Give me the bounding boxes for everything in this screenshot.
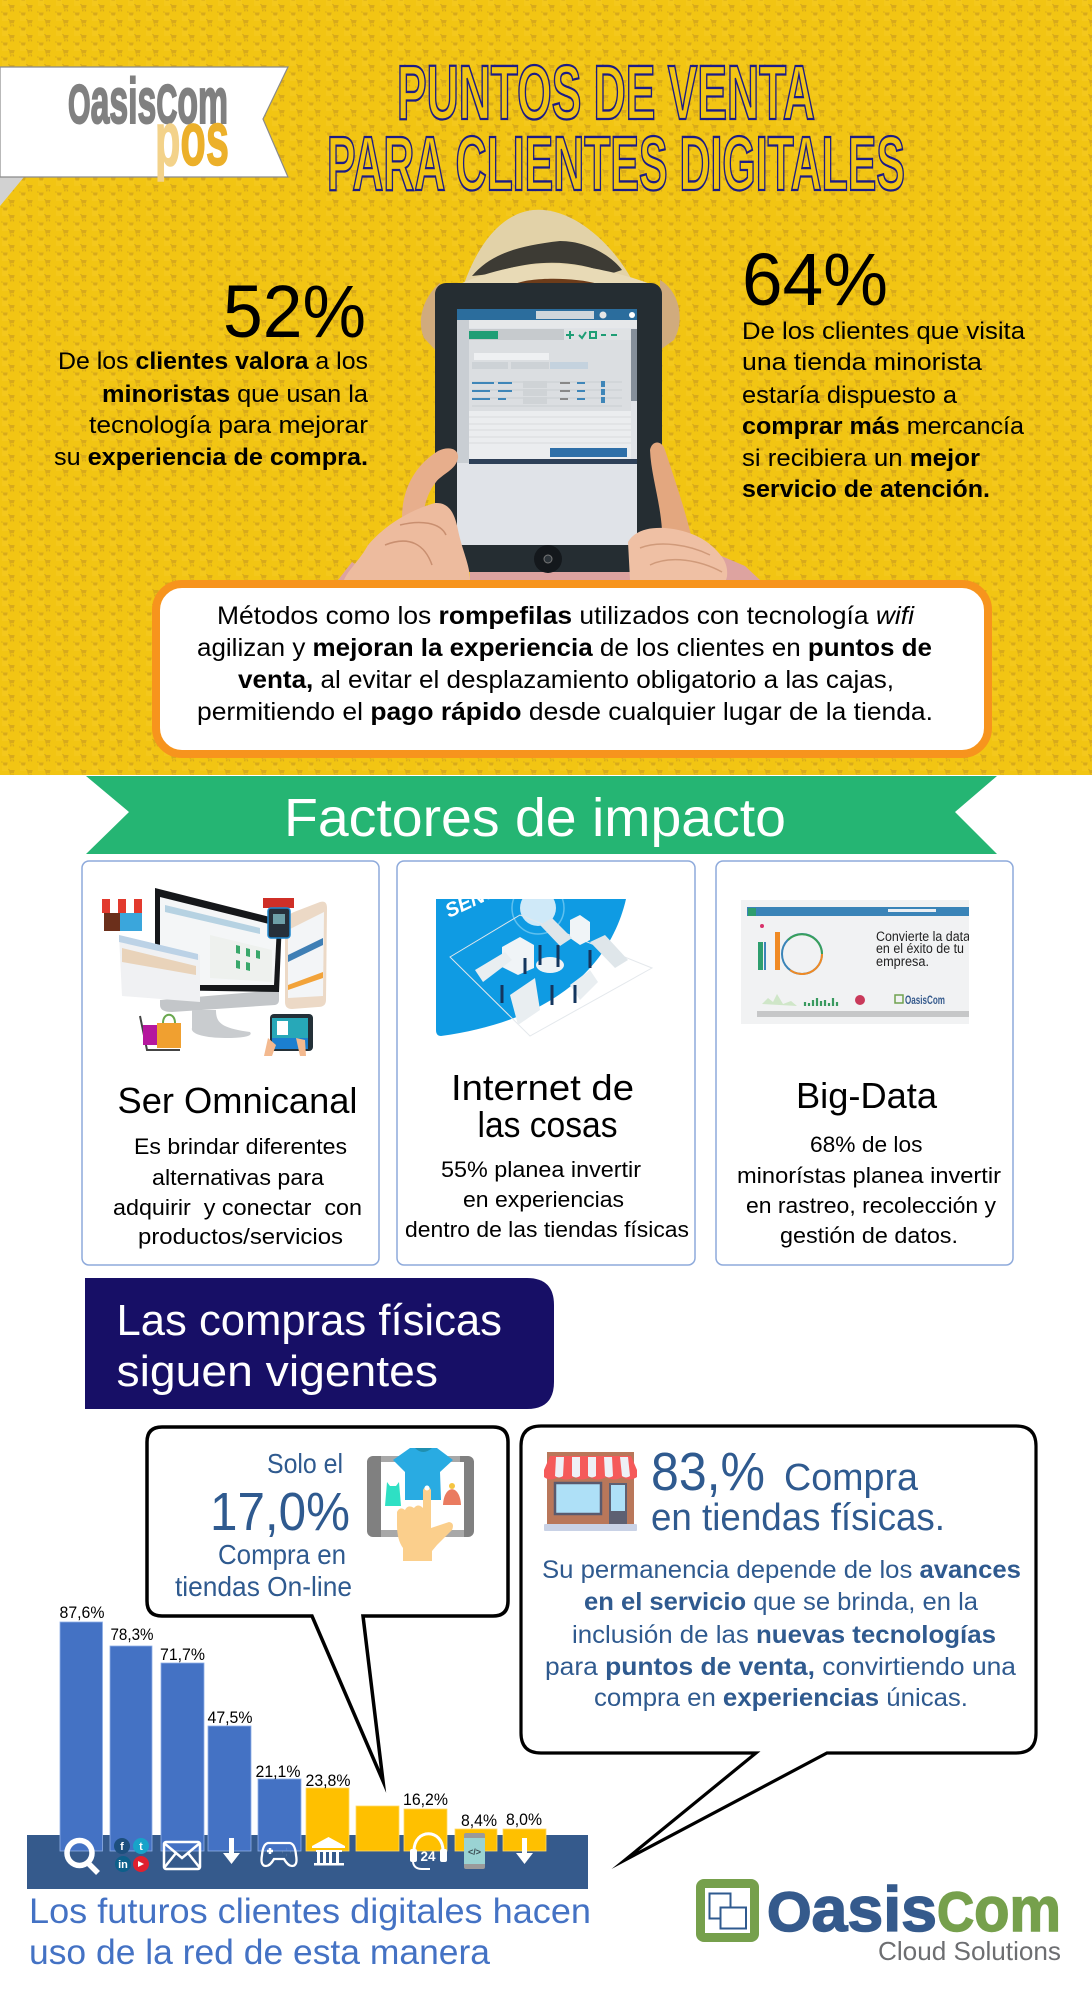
stat: 52% [54, 270, 368, 471]
icon: 24h headset: 24 [420, 1849, 436, 1864]
icon: search [67, 1840, 98, 1873]
bar value labels: 16,2% [403, 1790, 448, 1809]
stat: 64%: servicio de atención. [742, 476, 990, 503]
icon: game controller [262, 1843, 296, 1866]
heading: Las compras físicas siguen vigentes: Las compras físicas [116, 1296, 502, 1345]
bar value labels: 87,6% [60, 1603, 104, 1622]
illustration: isometric smart store: SENS [442, 879, 501, 923]
illustration: analytics screenshot: Convierte la data [876, 929, 970, 944]
stat: 64% [742, 238, 1025, 503]
stat: 64%: si recibiera un mejor [742, 445, 980, 472]
panel: Internet de las cosas [397, 861, 695, 1265]
hat crown [464, 210, 634, 284]
icon: mobile code: </> [468, 1847, 481, 1857]
stat: 52%: su experiencia de compra. [54, 444, 368, 471]
panel: Ser Omnicanal [82, 861, 379, 1265]
logo ribbon: OasisCom POS: OasisCom [68, 65, 228, 137]
heading ribbon: Factores de impacto: Factores de impacto [284, 788, 786, 848]
logo ribbon: OasisCom POS [0, 65, 288, 206]
panel: Ser Omnicanal: productos/servicios [138, 1224, 343, 1249]
stat: 64%: De los clientes que visita [742, 318, 1025, 345]
speech bubble: physical stores: compra en experiencias únicas. [594, 1684, 968, 1712]
illustration: analytics screenshot: OasisCom [905, 993, 945, 1007]
stat: 52%: minoristas que usan la [102, 381, 368, 408]
photo: person with hat holding tablet [338, 210, 760, 580]
panel: Internet de las cosas: dentro de las tiendas físicas [405, 1217, 689, 1242]
stat: 64%: estaría dispuesto a [742, 382, 957, 409]
bar chart: digital usage [27, 1603, 588, 1889]
bar value labels: 71,7% [160, 1645, 205, 1664]
icon: tablet shopping [367, 1448, 474, 1561]
speech bubble: online purchases: tiendas On-line [175, 1571, 352, 1602]
panel: Internet de las cosas: 55% planea invertir [441, 1157, 641, 1182]
speech bubble: online purchases: Compra en [218, 1539, 346, 1570]
panel: Ser Omnicanal: Es brindar diferentes [134, 1134, 347, 1159]
panel: Internet de las cosas: en experiencias [463, 1187, 624, 1212]
speech bubble: online purchases: 17,0% [210, 1482, 350, 1542]
illustration: analytics screenshot [741, 900, 970, 1024]
icon: download arrow [516, 1838, 533, 1864]
chart band [27, 1835, 588, 1889]
stat: 52%: tecnología para mejorar [89, 412, 368, 439]
illustration: analytics screenshot: empresa. [876, 954, 929, 969]
hat brim behind tablet [421, 280, 680, 355]
bar value labels: 78,3% [110, 1625, 154, 1644]
logo: OasisCom Cloud Solutions: Oasis [767, 1875, 937, 1945]
stat: 52%: 52% [223, 270, 366, 353]
title [327, 50, 905, 207]
yellow bars [306, 1788, 546, 1851]
logo: OasisCom Cloud Solutions [696, 1875, 1061, 1966]
heading: Las compras físicas siguen vigentes: siguen vigentes [116, 1347, 438, 1396]
illustration: analytics screenshot: en el éxito de tu [876, 941, 964, 956]
icon: mail [164, 1842, 200, 1869]
yellow patterned background [0, 0, 1092, 775]
speech bubble: physical stores: Compra [784, 1457, 919, 1499]
right hand [650, 442, 691, 535]
heading ribbon: Factores de impacto [86, 776, 997, 854]
tablet [435, 283, 662, 572]
icon: social networks: in [118, 1859, 128, 1871]
speech bubble: physical stores: en el servicio que se brinda, en la [584, 1588, 978, 1616]
panel: Big-Data: gestión de datos. [780, 1223, 958, 1248]
logo: OasisCom Cloud Solutions: Com [937, 1875, 1061, 1945]
speech bubble: online purchases [147, 1427, 508, 1781]
blue bars [60, 1622, 301, 1851]
bar value labels: 21,1% [256, 1762, 300, 1781]
icon: storefront [544, 1452, 637, 1531]
panel: Big-Data [716, 861, 1013, 1265]
icon: social networks: f [120, 1841, 124, 1853]
heading: Las compras físicas siguen vigentes [85, 1278, 554, 1409]
stat: 64%: una tienda minorista [742, 349, 982, 376]
speech bubble: physical stores: inclusión de las nuevas tecnologías [572, 1621, 996, 1649]
POS icon [263, 898, 294, 908]
hat band [472, 241, 622, 276]
icon: 24h headset [410, 1834, 447, 1869]
sleeves [338, 552, 760, 580]
bar value labels: 8,0% [506, 1810, 542, 1829]
speech bubble: physical stores: 83,% [651, 1442, 765, 1502]
icon: mobile code [464, 1833, 485, 1869]
logo: OasisCom Cloud Solutions: Cloud Solutions [878, 1936, 1061, 1966]
logo ribbon: OasisCom POS: pos [155, 97, 229, 182]
bar value labels: 23,8% [306, 1771, 350, 1790]
speech bubble: online purchases: Solo el [267, 1448, 343, 1479]
hat brim [460, 264, 650, 284]
bar value labels [60, 1603, 542, 1830]
stat: 64%: comprar más mercancía [742, 413, 1024, 440]
panel: Big-Data: en rastreo, recolección y [746, 1193, 996, 1218]
stat: 52%: De los clientes valora a los [58, 348, 368, 375]
illustration: isometric smart store [436, 899, 653, 1036]
panel: Internet de las cosas: las cosas [478, 1104, 618, 1145]
panel: Big-Data: 68% de los [810, 1132, 922, 1157]
speech bubble: physical stores: para puntos de venta, convirtiendo una [545, 1653, 1016, 1681]
callout: rompefilas: venta, al evitar el desplazamiento obligatorio a las cajas, [238, 666, 894, 694]
illustration: omnichannel devices [102, 888, 327, 1056]
caption: chart description: Los futuros clientes digitales hacen [29, 1892, 591, 1931]
panel: Ser Omnicanal: Ser Omnicanal [118, 1080, 358, 1121]
callout: rompefilas [156, 584, 988, 754]
callout: rompefilas: Métodos como los rompefilas utilizados con tecnología wifi [217, 602, 916, 630]
callout: rompefilas: agilizan y mejoran la experiencia de los clientes en puntos de [197, 634, 932, 662]
speech bubble: physical stores [521, 1426, 1036, 1860]
left hand [402, 448, 458, 518]
icon: social networks [114, 1838, 149, 1872]
tablet screen [457, 309, 637, 545]
icon: bank [312, 1837, 345, 1866]
panel: Ser Omnicanal: adquirir y conectar con [113, 1195, 362, 1220]
panel: Big-Data: minorístas planea invertir [737, 1163, 1001, 1188]
cart with bags [140, 1016, 180, 1050]
icon: social networks: t [139, 1841, 143, 1853]
speech bubble: physical stores: en tiendas físicas. [651, 1497, 945, 1539]
panel: Big-Data: Big-Data [796, 1075, 938, 1116]
speech bubble: physical stores: Su permanencia depende de los avances [542, 1556, 1021, 1584]
store icon [104, 910, 142, 931]
stat: 64%: 64% [742, 238, 888, 321]
caption: chart description: uso de la red de esta manera [29, 1933, 491, 1972]
callout: rompefilas: permitiendo el pago rápido desde cualquier lugar de la tienda. [197, 698, 933, 726]
bar value labels: 8,4% [461, 1811, 497, 1830]
panel: Internet de las cosas: Internet de [451, 1067, 634, 1108]
icon: download arrow [223, 1838, 240, 1864]
tablet with hands [270, 1014, 313, 1051]
bar value labels: 47,5% [208, 1708, 252, 1727]
caption: chart description [29, 1892, 591, 1972]
panel: Ser Omnicanal: alternativas para [152, 1165, 325, 1190]
